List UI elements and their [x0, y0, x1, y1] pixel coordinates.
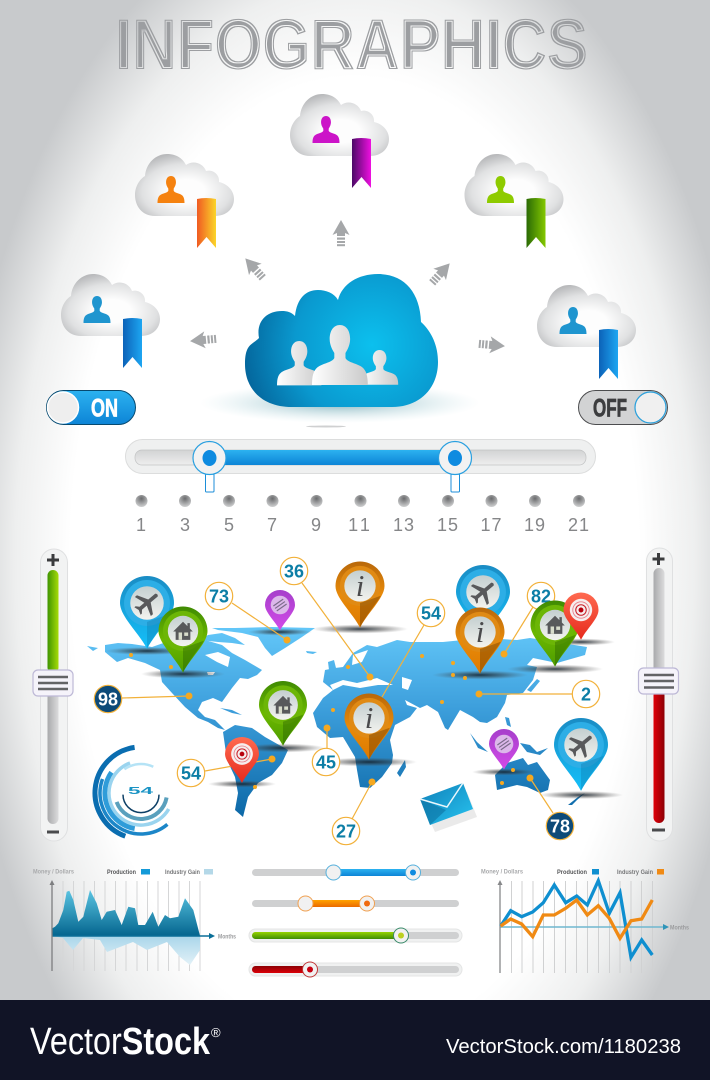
UK [328, 660, 336, 670]
callout leader lines [122, 583, 572, 819]
scale labels: 17 [480, 515, 503, 535]
arrow right [478, 335, 506, 355]
callout 36 [280, 557, 308, 585]
Iceland [306, 651, 317, 654]
New Guinea [520, 743, 548, 755]
Greenland [212, 627, 315, 656]
area chart [33, 868, 236, 971]
line chart: Money / Dollars [481, 868, 523, 876]
pin: blue plane 2 [456, 565, 510, 638]
vertical slider right [638, 548, 678, 841]
callout 45 [312, 748, 340, 776]
cloud: right blue user [537, 285, 636, 379]
radial gauge: 54 [128, 786, 154, 797]
footer band [0, 1000, 710, 1080]
area chart: Industry Gain [165, 869, 200, 876]
pin: red target 1 [225, 737, 259, 783]
pin: green house 1 [158, 606, 208, 673]
scale dots [136, 495, 585, 507]
pin: purple list 2 [489, 729, 519, 770]
toggle ON: ON [91, 394, 118, 422]
cloud: orange user [135, 154, 234, 248]
scale labels: 9 [311, 515, 321, 535]
arctic islands [200, 633, 245, 645]
callout 54 left [177, 759, 205, 787]
scale labels: 19 [524, 515, 546, 535]
South America [223, 725, 288, 817]
footer logo: VectorStock [30, 1021, 211, 1063]
cloud: green user [464, 154, 564, 248]
scale labels: 11 [348, 515, 373, 535]
callout 73 [205, 582, 233, 610]
callout 54 top [417, 599, 445, 627]
pin: orange info 1 [336, 562, 384, 628]
Philippines [505, 717, 511, 727]
pin: orange info 2: i [365, 700, 373, 735]
callout 36: 36 [284, 562, 304, 582]
arrow up-right [426, 258, 456, 288]
callout 54 top: 54 [421, 604, 441, 624]
registered mark: ® [211, 1025, 221, 1040]
vertical slider left [33, 549, 73, 841]
line chart [481, 868, 689, 973]
pin: green house 2 [259, 681, 307, 746]
North America [105, 640, 262, 730]
mini slider orange [252, 896, 459, 911]
cloud: left blue user [61, 274, 160, 368]
radial gauge [95, 747, 169, 836]
pin: blue plane 3 [554, 718, 608, 791]
pin: orange info 1: i [356, 568, 364, 603]
area chart: Money / Dollars [33, 868, 74, 876]
callout 78: 78 [550, 816, 570, 836]
callout 2 [572, 680, 600, 708]
pin: orange info 2 [344, 694, 394, 760]
pin: blue plane 1 [120, 576, 174, 649]
central blue cloud [200, 274, 480, 428]
callout 27: 27 [336, 822, 356, 842]
envelope icon [420, 783, 477, 832]
mini slider red [249, 962, 462, 977]
callout 98: 98 [98, 690, 118, 710]
arrow up [332, 220, 350, 246]
arrow left [189, 330, 217, 350]
pin: orange info 3 [456, 608, 504, 674]
toggle ON [46, 390, 136, 424]
map location dots [129, 636, 534, 789]
pin: green house 3 [530, 600, 580, 667]
callout 82: 82 [531, 586, 551, 606]
toggle OFF [578, 390, 668, 424]
Madagascar [397, 760, 406, 777]
arrow up-left [239, 253, 269, 283]
Indonesia [470, 733, 488, 752]
range slider [126, 440, 596, 492]
map lakes and seas [205, 650, 412, 690]
area chart: Production [107, 869, 136, 876]
callout 27 [332, 817, 360, 845]
pin shadows [105, 624, 623, 799]
Japan [527, 679, 540, 692]
Australia [495, 758, 550, 793]
Cuba [220, 708, 242, 715]
Eurasia and Africa [313, 638, 587, 788]
cloud: magenta user [290, 94, 389, 188]
callout 98 [94, 685, 122, 713]
pin: orange info 3: i [476, 614, 484, 649]
callout 54 left: 54 [181, 764, 201, 784]
callout 73: 73 [209, 586, 229, 606]
scale labels: 5 [224, 515, 234, 535]
mini slider green [249, 928, 462, 943]
scale labels: 3 [180, 515, 190, 535]
callout 45: 45 [316, 752, 336, 772]
pin: red target 2 [564, 592, 598, 640]
toggle OFF: OFF [593, 394, 627, 422]
mini slider blue [252, 865, 459, 880]
scale labels: 1 [136, 515, 146, 535]
New Zealand [568, 793, 585, 805]
pin: purple list 1 [265, 590, 295, 630]
scale labels [136, 515, 590, 535]
scale labels: 7 [267, 515, 277, 535]
callout 2: 2 [581, 684, 591, 704]
Alaska tip [87, 646, 98, 651]
scale labels: 21 [568, 515, 590, 535]
callout 82 [527, 582, 555, 610]
scale labels: 15 [437, 515, 459, 535]
footer url: VectorStock.com/1180238 [446, 1035, 681, 1058]
line chart: Months [670, 924, 689, 932]
callout 78 [546, 812, 574, 840]
area chart: Months [218, 934, 236, 940]
world map [87, 627, 587, 817]
title: INFOGRAPHICS [115, 6, 588, 85]
scale labels: 13 [393, 515, 415, 535]
line chart: Production [557, 869, 587, 876]
line chart: Industry Gain [617, 869, 653, 876]
